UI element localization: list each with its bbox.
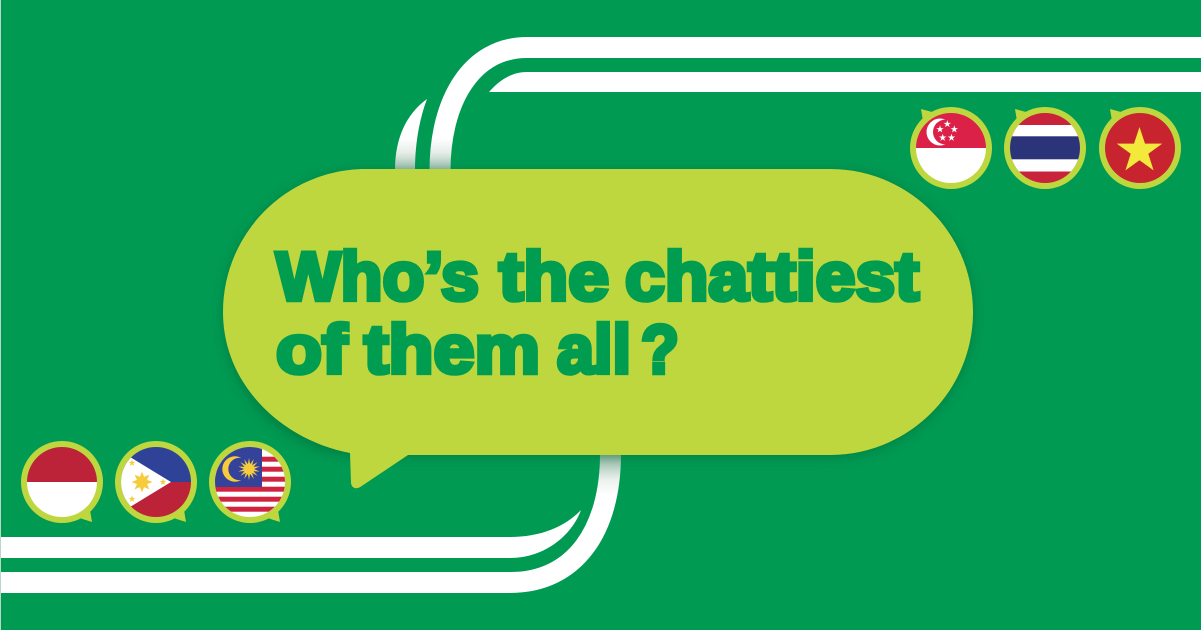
top white road stripes (395, 48, 1201, 171)
title: all (557, 311, 631, 388)
title: ? (641, 311, 679, 388)
title: chattiest (625, 238, 919, 315)
speech bubble (223, 169, 973, 488)
title (276, 238, 919, 388)
flag: Singapore (910, 107, 992, 189)
flag: Indonesia (21, 441, 103, 523)
flag: Thailand (1004, 107, 1086, 189)
speech bubble shadow (223, 171, 973, 457)
title: Who’s (276, 238, 479, 315)
flag: Vietnam (1099, 107, 1181, 189)
bottom white road stripes (1, 454, 610, 582)
title: them (364, 311, 540, 388)
title: the (499, 238, 609, 315)
title: of (276, 311, 348, 388)
flag: Philippines (115, 441, 197, 523)
flag: Malaysia (209, 441, 291, 523)
